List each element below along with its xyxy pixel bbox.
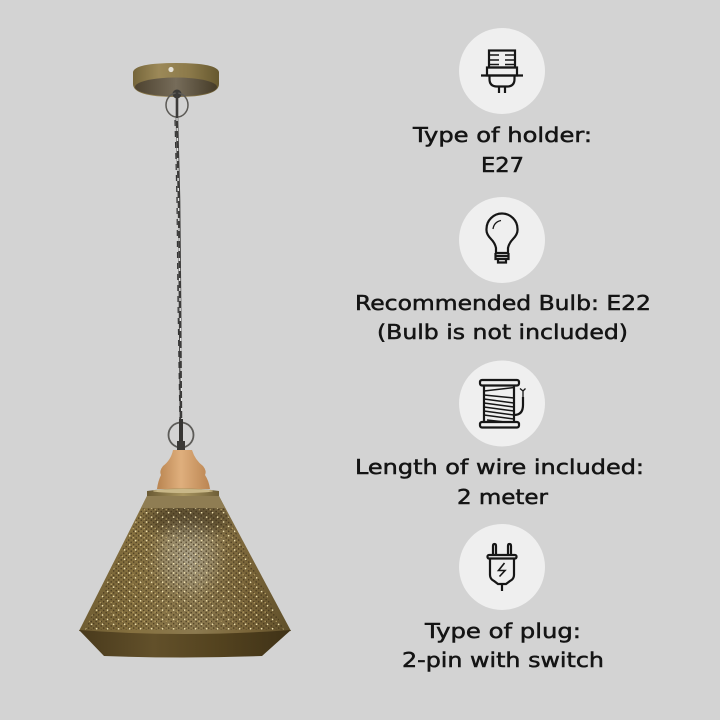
metal rim <box>147 488 219 497</box>
icon: light bulb <box>459 197 545 283</box>
perforated cone shade <box>79 496 291 634</box>
icon: two-pin plug <box>459 524 545 610</box>
spec: wire <box>355 360 644 509</box>
text: bulb: (Bulb is not included) <box>377 320 628 344</box>
text: holder <box>412 123 592 177</box>
text: bulb <box>355 291 651 344</box>
text: bulb: Recommended Bulb: E22 <box>355 291 651 315</box>
lower band <box>79 630 291 658</box>
text: plug: 2-pin with switch <box>402 648 604 672</box>
wooden cap <box>157 450 210 489</box>
spec: holder <box>412 28 592 177</box>
text: holder: Type of holder: <box>412 123 592 147</box>
hanging ring <box>168 419 194 451</box>
ceiling plate <box>133 63 219 98</box>
text: plug: Type of plug: <box>424 619 581 643</box>
text: plug <box>402 619 604 672</box>
text: wire: 2 meter <box>457 485 549 509</box>
chain and cord <box>166 92 188 425</box>
icon: lamp holder <box>459 28 545 114</box>
text: holder: E27 <box>481 153 524 177</box>
pendant lamp <box>70 63 300 658</box>
text: wire <box>355 455 644 509</box>
icon: wire spool <box>459 360 545 446</box>
spec: plug <box>402 524 604 672</box>
text: wire: Length of wire included: <box>355 455 644 479</box>
spec: bulb <box>355 197 651 344</box>
